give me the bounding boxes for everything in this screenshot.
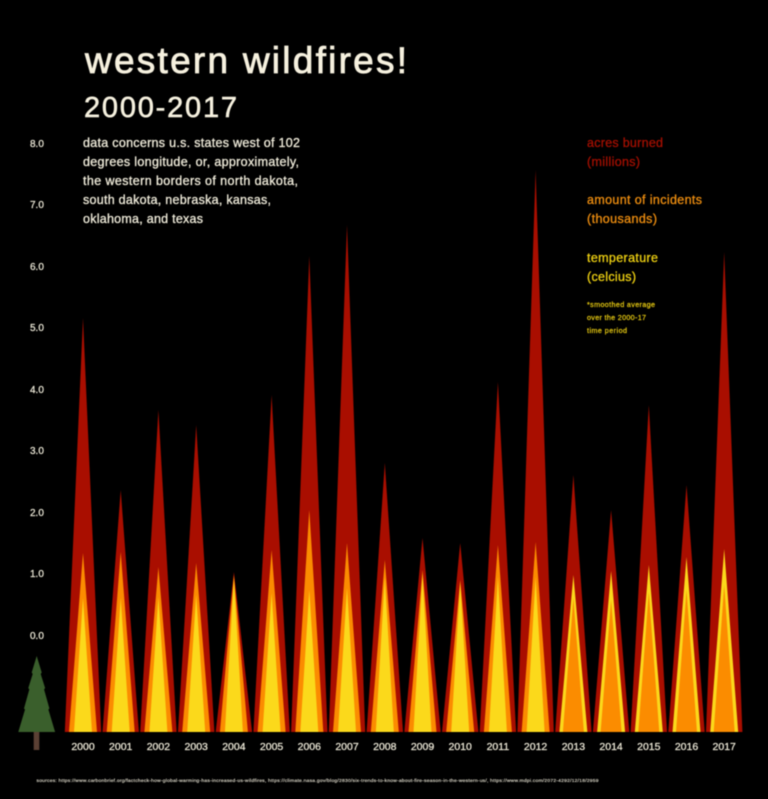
y axis labels: 8.0: [30, 139, 44, 150]
icon: pine tree: [18, 656, 55, 750]
legend: [587, 136, 702, 335]
y axis labels: 4.0: [30, 385, 44, 396]
2006 triangles: [291, 256, 328, 732]
x axis year labels: 2014: [599, 741, 623, 753]
legend: temperature footnote: *smoothed average: [587, 300, 655, 309]
2001 triangles: [102, 490, 139, 732]
2015 triangles: [631, 405, 667, 732]
legend: acres burned: [587, 136, 663, 169]
x axis year labels: 2004: [222, 741, 246, 753]
x axis year labels: 2010: [449, 741, 472, 753]
legend: temperature: temperature: [587, 251, 658, 265]
x axis year labels: 2011: [487, 741, 509, 753]
x axis year labels: 2008: [373, 741, 397, 753]
y axis labels: [30, 139, 44, 642]
legend: acres burned: (millions): [587, 155, 640, 169]
x axis year labels: 2015: [637, 741, 661, 753]
2007 triangles: [329, 225, 365, 732]
y axis labels: 5.0: [30, 323, 44, 334]
2005 triangles: [253, 395, 290, 732]
2013 triangles: [555, 475, 592, 732]
x axis year labels: [71, 741, 736, 753]
2016 triangles: [668, 485, 705, 732]
legend: amount of incidents: amount of incidents: [587, 193, 702, 207]
legend: amount of incidents: (thousands): [587, 212, 657, 226]
title: western wildfires!: [84, 40, 407, 81]
2008 triangles: [367, 463, 403, 732]
sources footnote: sources: https://www.carbonbrief.org/factcheck-how-global-warming-has-increased-us-wildfires, https://climate.nasa.gov/blog/2830/six-trends-to-know-about-fire-season-in-the-western-us/, https://www.mdpi.com/2072-4292/12/18/2959: [36, 778, 599, 784]
y axis labels: 6.0: [30, 262, 44, 273]
description text: [83, 136, 300, 226]
x axis year labels: 2017: [713, 741, 736, 753]
x axis year labels: 2012: [524, 741, 547, 753]
x axis year labels: 2016: [675, 741, 698, 753]
legend: temperature footnote: [587, 300, 655, 335]
2009 triangles: [404, 538, 441, 732]
2000 triangles: [65, 318, 101, 732]
x axis year labels: 2005: [260, 741, 283, 753]
2017 triangles: [706, 252, 742, 732]
legend: amount of incidents: [587, 193, 702, 226]
x axis year labels: 2002: [147, 741, 170, 753]
description text: degrees longitude, or, approximately,: [83, 155, 299, 169]
subtitle: 2000-2017: [84, 92, 237, 124]
2011 triangles: [480, 382, 516, 732]
x axis year labels: 2001: [109, 741, 133, 753]
legend: acres burned: acres burned: [587, 136, 663, 150]
x axis year labels: 2006: [298, 741, 321, 753]
legend: temperature: [587, 251, 658, 284]
2004 triangles: [216, 572, 252, 732]
2003 triangles: [178, 425, 214, 732]
legend: temperature footnote: time period: [587, 326, 627, 335]
x axis year labels: 2000: [71, 741, 95, 753]
fire chart: triangles by year: [65, 170, 742, 732]
description text: the western borders of north dakota,: [83, 174, 298, 188]
x axis year labels: 2007: [335, 741, 359, 753]
y axis labels: 0.0: [30, 631, 44, 642]
2010 triangles: [442, 543, 478, 732]
legend: temperature: (celcius): [587, 270, 636, 284]
y axis labels: 3.0: [30, 446, 44, 457]
2012 triangles: [517, 170, 554, 732]
x axis year labels: 2003: [185, 741, 208, 753]
y axis labels: 7.0: [30, 200, 44, 211]
2002 triangles: [140, 410, 177, 732]
x axis year labels: 2009: [411, 741, 434, 753]
legend: temperature footnote: over the 2000-17: [587, 313, 646, 322]
description text: south dakota, nebraska, kansas,: [83, 193, 271, 207]
description text: oklahoma, and texas: [83, 212, 203, 226]
y axis labels: 1.0: [30, 569, 44, 580]
description text: data concerns u.s. states west of 102: [83, 136, 300, 150]
2014 triangles: [593, 510, 629, 732]
y axis labels: 2.0: [30, 508, 44, 519]
x axis year labels: 2013: [562, 741, 585, 753]
